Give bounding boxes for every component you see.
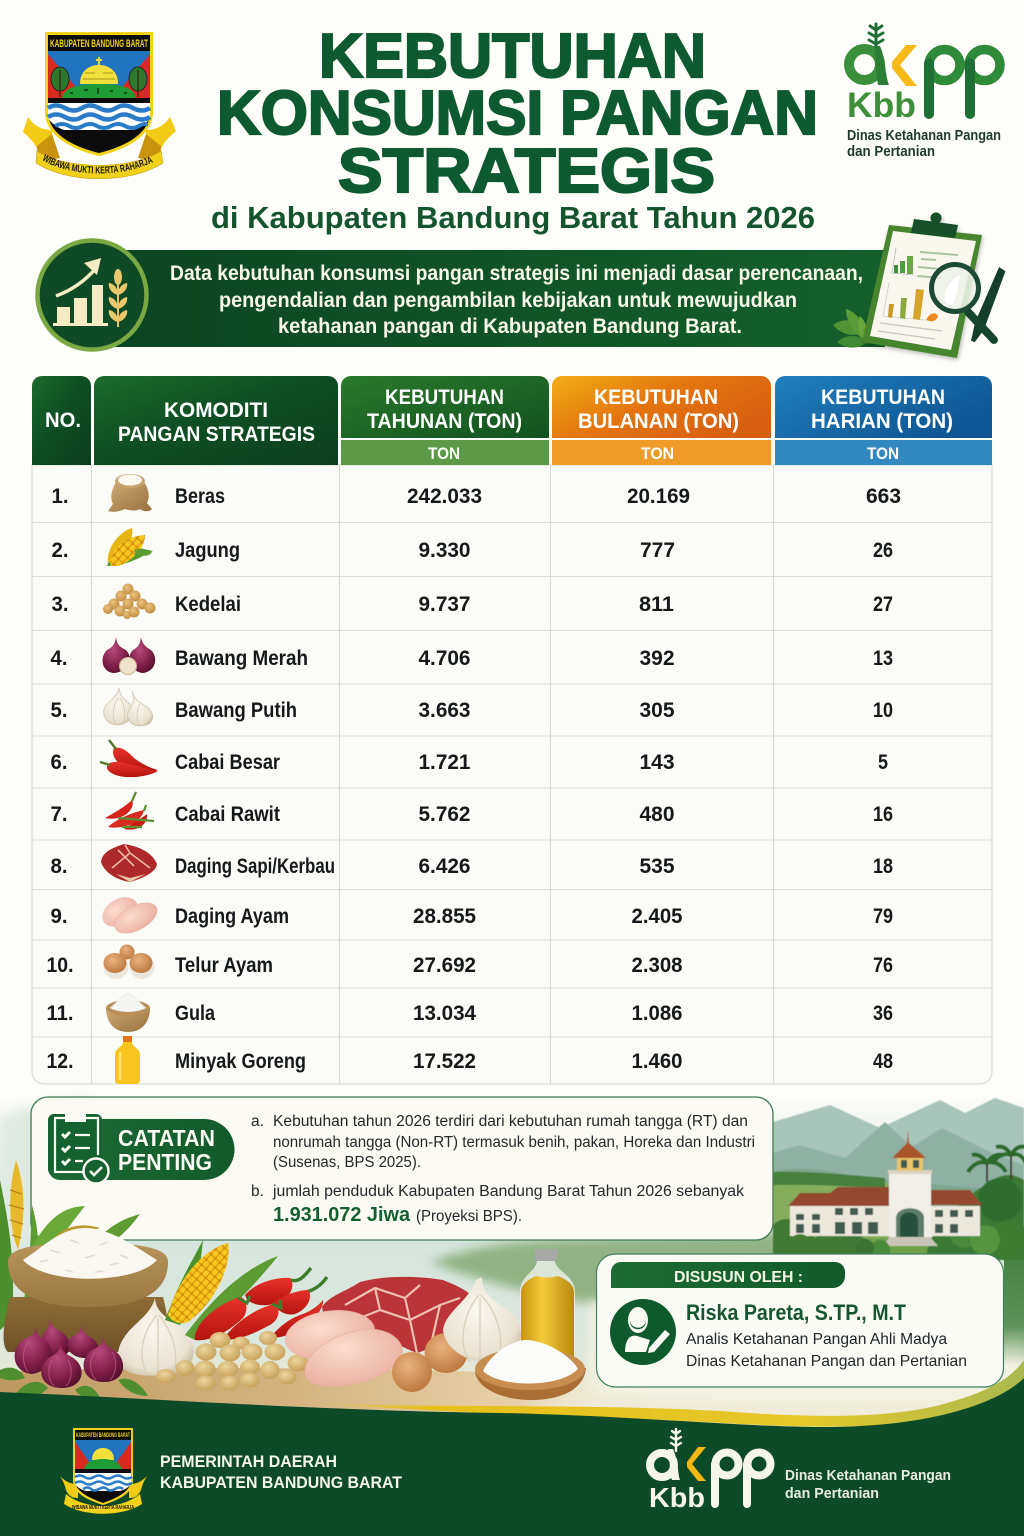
- row 3: Kedelai: 811: [639, 593, 674, 616]
- icon: corn: [107, 528, 153, 566]
- row 2: Jagung: 2.: [52, 539, 68, 562]
- footer emblem: KABUPATEN BANDUNG BARAT: [76, 1433, 130, 1439]
- row 4: Bawang Merah: 4.706: [418, 647, 470, 670]
- note a: Kebutuhan tahun 2026 terdiri dari kebutuhan rumah tangga (RT) dan: [273, 1113, 748, 1130]
- row 5: Bawang Putih: 10: [873, 699, 893, 722]
- garlic bulb left: [118, 1298, 194, 1376]
- garlic bulb right: [443, 1277, 521, 1362]
- header: kebutuhan bulanan: [552, 376, 771, 465]
- note b: (Proyeksi BPS).: [416, 1208, 522, 1225]
- row 4: Bawang Merah: 4.: [50, 647, 68, 670]
- badge: catatan penting: [48, 1110, 234, 1184]
- row 6: Cabai Besar: 6.: [50, 751, 68, 774]
- disusun label: DISUSUN OLEH :: [674, 1269, 803, 1286]
- icon: oil bottle: [115, 1036, 140, 1084]
- row 10: Telur Ayam: 76: [873, 954, 893, 977]
- wooden table: [0, 1368, 610, 1416]
- panel: catatan penting: [31, 1097, 773, 1240]
- row 1: Beras: 242.033: [407, 485, 482, 508]
- row 4: Bawang Merah: 392: [640, 647, 674, 670]
- panel: disusun oleh: [596, 1254, 1004, 1387]
- row 11: Gula: [46, 993, 893, 1032]
- title: [217, 22, 818, 206]
- icon: bird's eye chili: [105, 792, 154, 830]
- row 8: Daging Sapi/Kerbau: 8.: [50, 855, 68, 878]
- footer text: dinas: dan Pertanian: [785, 1485, 879, 1502]
- row 9: Daging Ayam: 28.855: [413, 905, 476, 928]
- header: kebutuhan tahunan: TAHUNAN (TON): [367, 410, 522, 433]
- row 7: Cabai Rawit: 480: [640, 803, 674, 826]
- header: kebutuhan harian: TON: [867, 444, 899, 463]
- banner text: pengendalian dan pengambilan kebijakan untuk mewujudkan: [219, 289, 797, 312]
- author name and role: [686, 1300, 967, 1370]
- logo: DKPP KBB: Dinas Ketahanan Pangan: [847, 127, 1001, 144]
- icon: soybeans: [103, 584, 156, 619]
- note b: jumlah penduduk Kabupaten Bandung Barat Tahun 2026 sebanyak: [272, 1183, 744, 1200]
- row 9: Daging Ayam: 79: [873, 905, 893, 928]
- row 10: Telur Ayam: 27.692: [413, 954, 476, 977]
- row 10: Telur Ayam: 10.: [46, 954, 74, 977]
- emblem: Kabupaten Bandung Barat: WIBAWA MUKTI KERTA RAHARJA: [43, 154, 154, 174]
- row 2: Jagung: 26: [873, 539, 893, 562]
- logo: DKPP KBB: dan Pertanian: [847, 143, 935, 160]
- bowl of sugar: [475, 1340, 586, 1400]
- emblem: Kabupaten Bandung Barat: [23, 32, 176, 179]
- row 10: Telur Ayam: Telur Ayam: [175, 954, 273, 977]
- row 5: Bawang Putih: Bawang Putih: [175, 699, 297, 722]
- row 12: Minyak Goreng: 17.522: [413, 1050, 476, 1073]
- title: STRATEGIS: [338, 137, 715, 206]
- row 12: Minyak Goreng: 1.460: [632, 1050, 682, 1073]
- row 11: Gula: 1.086: [632, 1002, 682, 1025]
- header: komoditi: [94, 376, 338, 465]
- header: kebutuhan tahunan: [341, 376, 549, 465]
- row 7: Cabai Rawit: [50, 792, 893, 830]
- row 7: Cabai Rawit: 16: [873, 803, 893, 826]
- header: no: [32, 376, 91, 465]
- row 3: Kedelai: Kedelai: [175, 593, 241, 616]
- footer text: dinas: Dinas Ketahanan Pangan: [785, 1467, 951, 1484]
- footer text: pemerintah daerah: PEMERINTAH DAERAH: [160, 1452, 337, 1471]
- row 12: Minyak Goreng: 48: [873, 1050, 893, 1073]
- banner text: ketahanan pangan di Kabupaten Bandung Barat.: [278, 315, 742, 338]
- row 9: Daging Ayam: [50, 891, 893, 939]
- disusun label: [611, 1262, 845, 1288]
- header: kebutuhan tahunan: TON: [428, 444, 460, 463]
- row 6: Cabai Besar: [50, 740, 888, 777]
- badge: catatan penting: CATATAN: [118, 1125, 215, 1151]
- beef: [322, 1277, 473, 1353]
- emblem: Kabupaten Bandung Barat: KABUPATEN BANDUNG BARAT: [50, 38, 148, 50]
- header: kebutuhan tahunan: KEBUTUHAN: [385, 386, 504, 409]
- header: kebutuhan bulanan: KEBUTUHAN: [594, 386, 718, 409]
- note b: 1.931.072 Jiwa: [273, 1204, 411, 1226]
- row 10: Telur Ayam: 2.308: [632, 954, 683, 977]
- row 7: Cabai Rawit: 7.: [50, 803, 68, 826]
- shallots: [15, 1317, 123, 1388]
- note a: nonrumah tangga (Non-RT) termasuk benih, pakan, Horeka dan Industri: [273, 1134, 755, 1151]
- title: KEBUTUHAN: [319, 22, 706, 91]
- footer text: dinas: [785, 1467, 951, 1502]
- red chilies: [195, 1268, 327, 1340]
- note b: b.: [251, 1183, 264, 1200]
- header: komoditi: PANGAN STRATEGIS: [118, 423, 315, 446]
- rice stalk and leaves: [0, 1160, 140, 1330]
- corn: [165, 1240, 278, 1340]
- row 7: Cabai Rawit: 5.762: [418, 803, 470, 826]
- footer band: [0, 1360, 1024, 1536]
- row 8: Daging Sapi/Kerbau: 6.426: [418, 855, 470, 878]
- footer emblem: WIBAWA MUKTI KERTA RAHARJA: [72, 1505, 134, 1511]
- row 5: Bawang Putih: 305: [640, 699, 675, 722]
- header: kebutuhan bulanan: TON: [641, 444, 674, 463]
- icon: garlic: [104, 688, 153, 726]
- note a: (Susenas, BPS 2025).: [273, 1154, 421, 1171]
- row 7: Cabai Rawit: Cabai Rawit: [175, 803, 280, 826]
- author name and role: Dinas Ketahanan Pangan dan Pertanian: [686, 1353, 967, 1370]
- row 1: Beras: Beras: [175, 485, 225, 508]
- row 8: Daging Sapi/Kerbau: [50, 844, 893, 882]
- row 11: Gula: 13.034: [413, 1002, 476, 1025]
- banner text: [170, 262, 863, 338]
- row 9: Daging Ayam: 9.: [50, 905, 68, 928]
- badge: catatan penting: PENTING: [118, 1149, 212, 1175]
- footer logo: DKPP KBB: Kbb: [649, 1482, 705, 1513]
- icon: eggs: [104, 944, 154, 979]
- row 11: Gula: 36: [873, 1002, 893, 1025]
- footer emblem: [60, 1428, 147, 1514]
- row 9: Daging Ayam: Daging Ayam: [175, 905, 289, 928]
- note b: [251, 1183, 744, 1226]
- title: KONSUMSI PANGAN: [217, 79, 818, 148]
- header: kebutuhan harian: KEBUTUHAN: [821, 386, 945, 409]
- row 1: Beras: 1.: [52, 485, 68, 508]
- row 2: Jagung: 777: [640, 539, 675, 562]
- row 2: Jagung: [52, 528, 893, 566]
- footer logo: DKPP KBB: [649, 1429, 770, 1513]
- row 1: Beras: 663: [866, 485, 901, 508]
- table: [32, 376, 992, 1084]
- header: kebutuhan harian: [775, 376, 992, 465]
- illustration: mountains and government building: [773, 1098, 1024, 1260]
- row 6: Cabai Besar: Cabai Besar: [175, 751, 280, 774]
- note a: a.: [251, 1113, 264, 1130]
- row 4: Bawang Merah: 13: [873, 647, 893, 670]
- row 5: Bawang Putih: 5.: [50, 699, 68, 722]
- icon: rice sack: [108, 474, 152, 512]
- row 4: Bawang Merah: Bawang Merah: [175, 647, 308, 670]
- row 6: Cabai Besar: 5: [878, 751, 888, 774]
- icon: shallots: [103, 637, 155, 674]
- row 12: Minyak Goreng: Minyak Goreng: [175, 1050, 306, 1073]
- row 6: Cabai Besar: 143: [640, 751, 674, 774]
- row 8: Daging Sapi/Kerbau: 535: [640, 855, 675, 878]
- cooking oil bottle: [520, 1249, 575, 1358]
- footer text: pemerintah daerah: [160, 1452, 403, 1492]
- green leaves under shallots: [0, 1368, 148, 1402]
- icon: clipboard with magnifier and pen: [833, 212, 1003, 358]
- rice sack: [4, 1228, 168, 1352]
- row 1: Beras: 20.169: [627, 485, 690, 508]
- note a: [251, 1113, 755, 1171]
- footer text: pemerintah daerah: KABUPATEN BANDUNG BARAT: [160, 1473, 403, 1492]
- row 8: Daging Sapi/Kerbau: Daging Sapi/Kerbau: [175, 855, 335, 878]
- row 10: Telur Ayam: [46, 944, 893, 979]
- author name and role: Riska Pareta, S.TP., M.T: [686, 1300, 906, 1325]
- row 2: Jagung: 9.330: [418, 539, 470, 562]
- icon: author: [610, 1299, 676, 1365]
- row 12: Minyak Goreng: [46, 1036, 893, 1084]
- row 5: Bawang Putih: 3.663: [418, 699, 470, 722]
- subtitle: di Kabupaten Bandung Barat Tahun 2026: [211, 200, 815, 235]
- row 3: Kedelai: 27: [873, 593, 893, 616]
- row 11: Gula: Gula: [175, 1002, 215, 1025]
- row 11: Gula: 11.: [46, 1002, 74, 1025]
- row 3: Kedelai: 3.: [52, 593, 68, 616]
- row 8: Daging Sapi/Kerbau: 18: [873, 855, 893, 878]
- soybeans: [156, 1331, 308, 1390]
- icon: red chili: [100, 740, 158, 777]
- author name and role: Analis Ketahanan Pangan Ahli Madya: [686, 1331, 947, 1348]
- header: kebutuhan bulanan: BULANAN (TON): [578, 410, 739, 433]
- row 5: Bawang Putih: [50, 688, 893, 726]
- header: komoditi: KOMODITI: [164, 399, 268, 422]
- banner: description: [115, 250, 885, 347]
- chicken breast: [282, 1305, 403, 1386]
- header: kebutuhan harian: HARIAN (TON): [811, 410, 953, 433]
- row 4: Bawang Merah: [50, 637, 893, 674]
- eggs: [392, 1333, 468, 1392]
- icon: chicken breast: [97, 891, 162, 939]
- row 3: Kedelai: 9.737: [418, 593, 470, 616]
- scenery background: [0, 1095, 1024, 1430]
- header: no: NO.: [45, 409, 81, 432]
- table body: [32, 465, 992, 1084]
- illustration: food still life: [0, 1160, 610, 1416]
- row 9: Daging Ayam: 2.405: [632, 905, 683, 928]
- row 12: Minyak Goreng: 12.: [46, 1050, 74, 1073]
- logo: DKPP KBB: [847, 24, 1001, 160]
- icon: beef: [101, 844, 157, 882]
- banner text: Data kebutuhan konsumsi pangan strategis ini menjadi dasar perencanaan,: [170, 262, 863, 285]
- row 1: Beras: [52, 474, 901, 512]
- logo: DKPP KBB: Kbb: [847, 86, 916, 125]
- row 6: Cabai Besar: 1.721: [418, 751, 471, 774]
- icon: growth chart with wheat: [38, 240, 146, 350]
- row 3: Kedelai: [52, 584, 893, 619]
- icon: sugar bowl: [106, 993, 150, 1032]
- row 2: Jagung: Jagung: [175, 539, 240, 562]
